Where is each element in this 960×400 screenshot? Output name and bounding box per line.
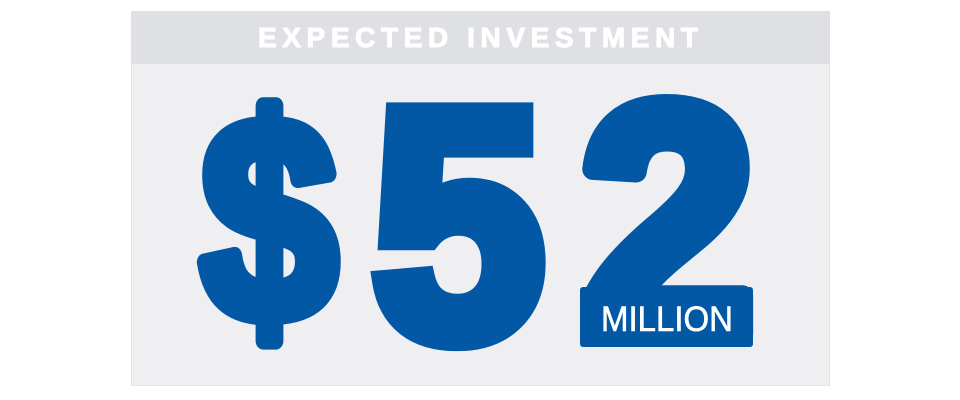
panel: card background (132, 12, 830, 386)
panel: header band (131, 11, 830, 64)
digit five: 5 (373, 44, 544, 400)
digit two: 2 (580, 38, 755, 400)
heading: EXPECTED INVESTMENT (258, 22, 698, 53)
million label: MILLION (601, 300, 733, 339)
million label (580, 287, 753, 347)
dollar sign: $ (201, 59, 337, 381)
